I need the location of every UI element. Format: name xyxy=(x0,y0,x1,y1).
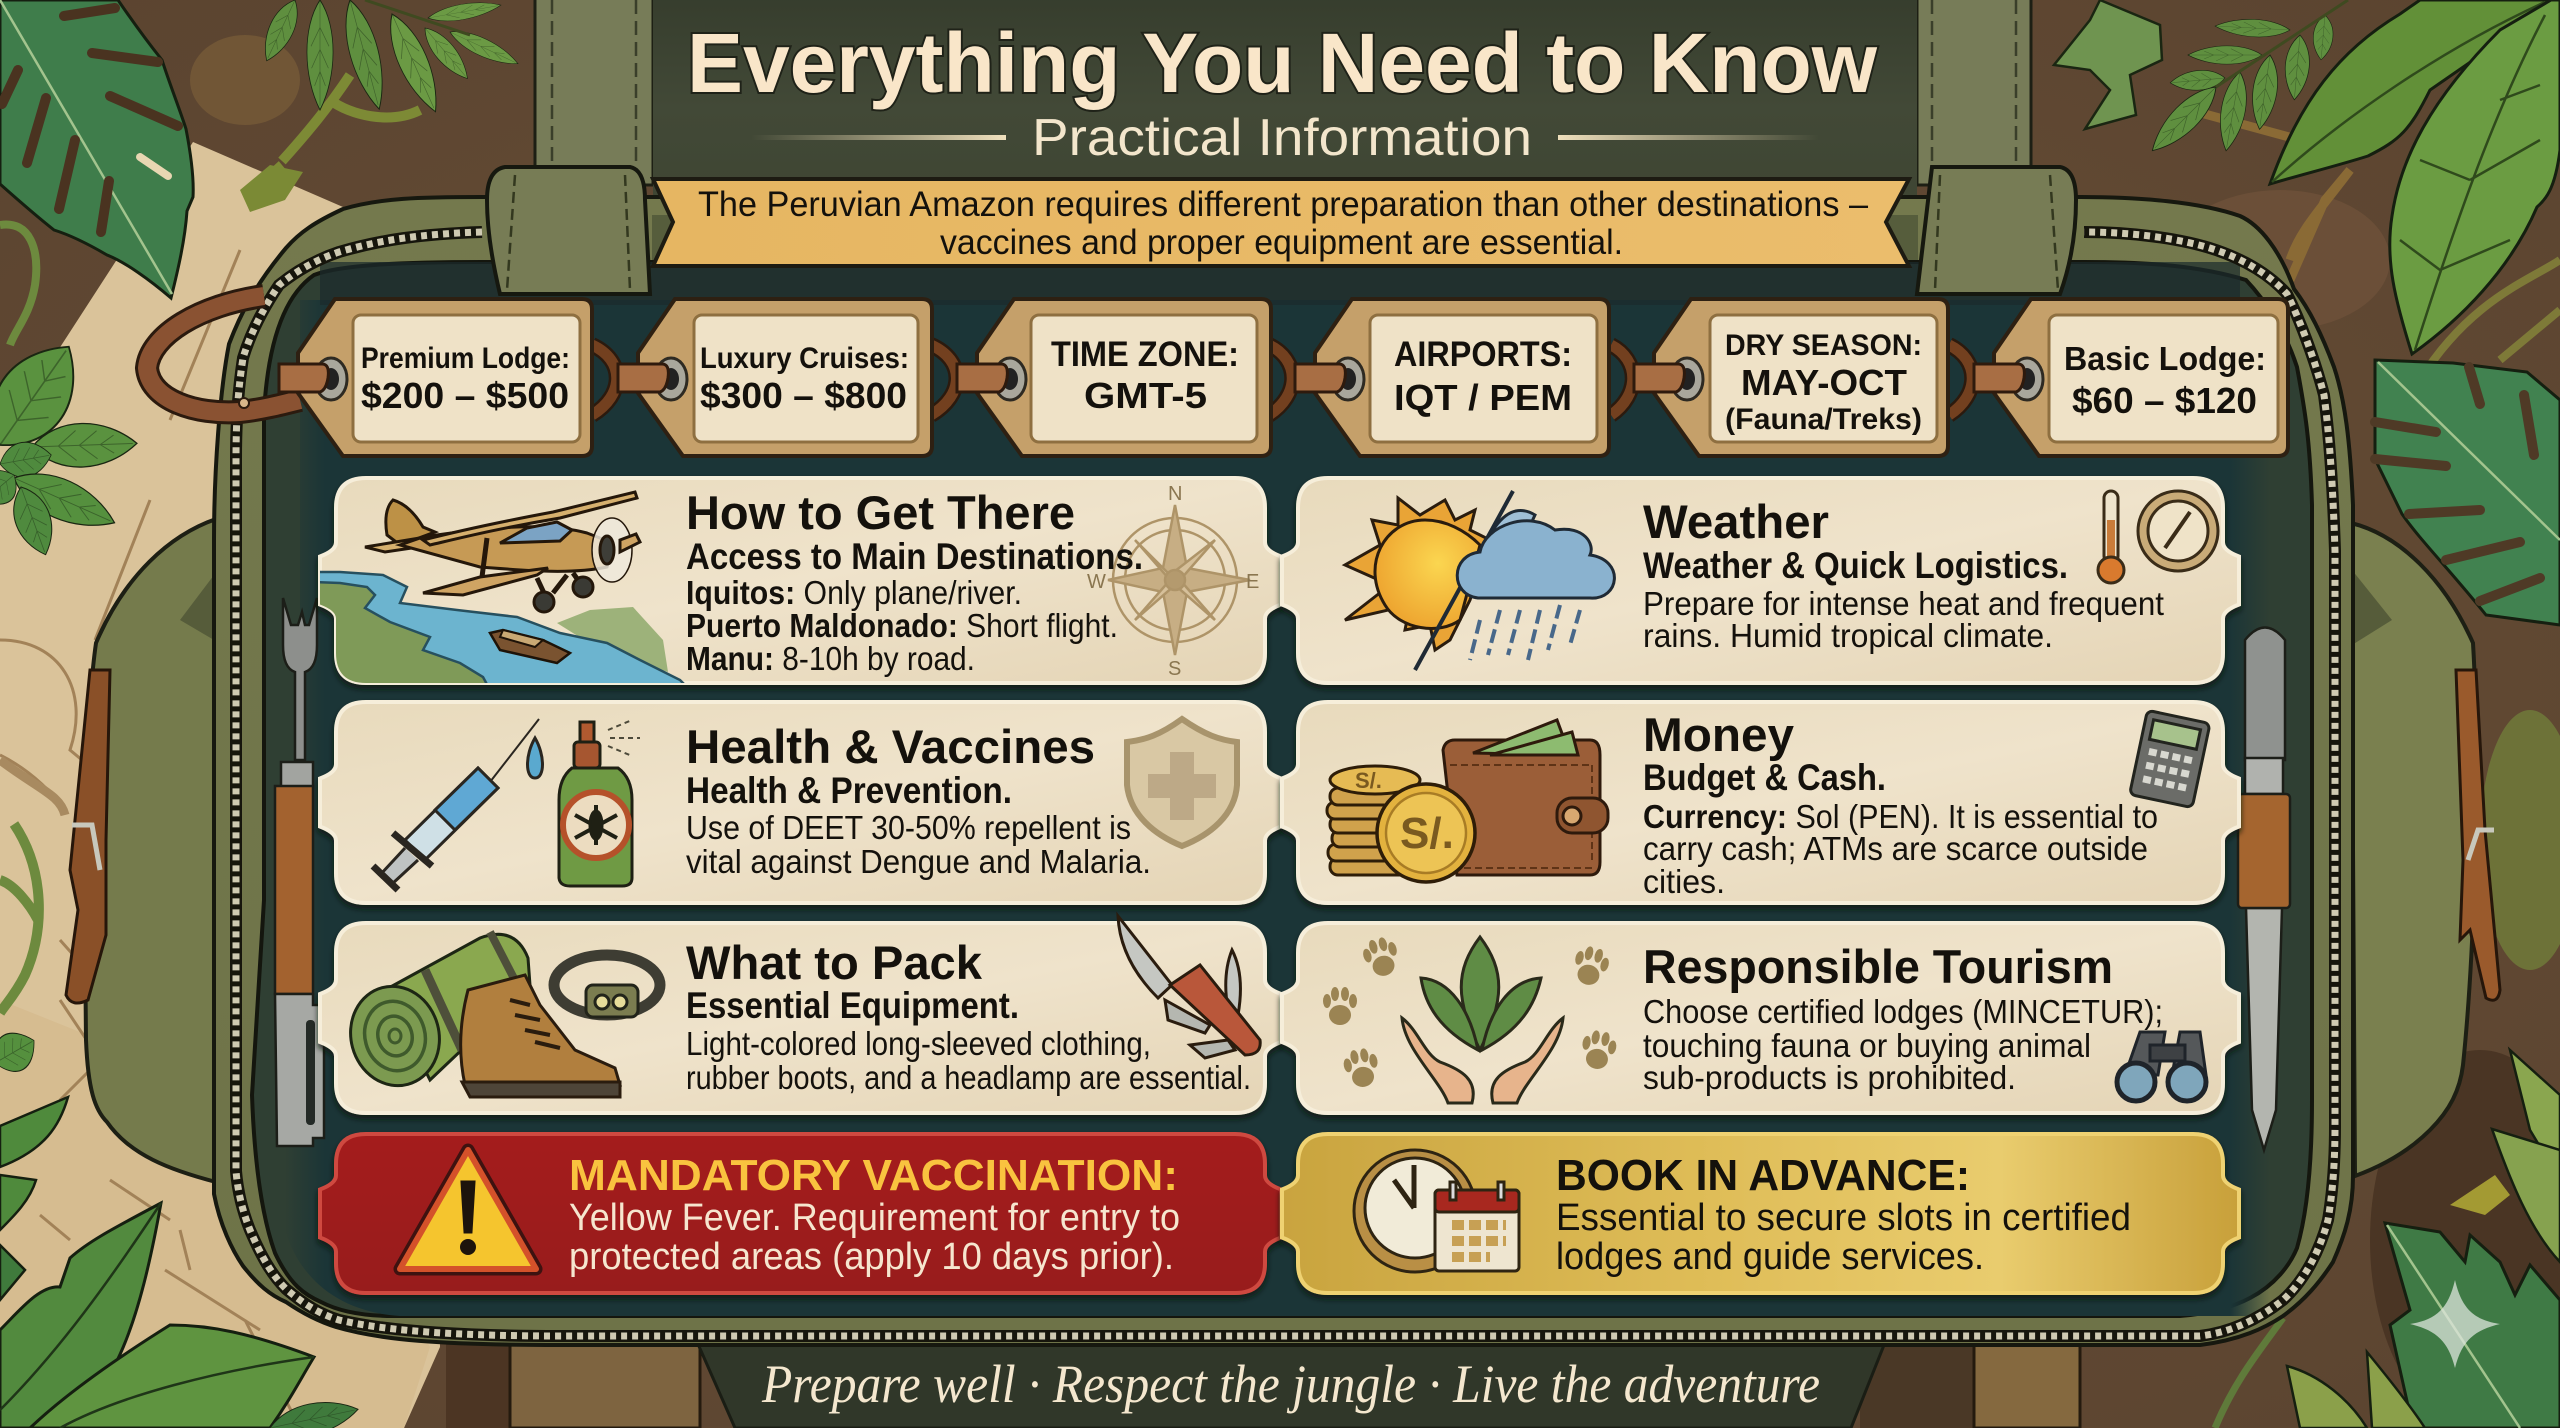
bag: zipper xyxy=(236,232,2335,1336)
card: Money xyxy=(1282,702,2239,903)
foliage: top-right big leaves xyxy=(2270,0,2560,354)
alert text xyxy=(569,1151,1180,1278)
foliage: left vine xyxy=(0,824,44,1080)
tag: Airports: AIRPORTS: xyxy=(1394,335,1572,374)
card text: Essential Equipment. xyxy=(686,985,1019,1026)
icon: animal paw prints xyxy=(1323,934,1619,1090)
bag: dark top panel xyxy=(653,0,1917,220)
tag: Basic Lodge xyxy=(1974,299,2288,456)
card text: rains. Humid tropical climate. xyxy=(1643,617,2053,654)
tag: Dry Season: (Fauna/Treks) xyxy=(1725,403,1922,436)
callout text: Essential to secure slots in certified xyxy=(1556,1197,2131,1239)
icon: hands holding plant xyxy=(1402,937,1563,1103)
alert text: MANDATORY VACCINATION: xyxy=(569,1151,1178,1200)
card text: Iquitos: Only plane/river. xyxy=(686,574,1022,611)
icon: calculator xyxy=(2130,710,2210,808)
card text: Prepare for intense heat and frequent xyxy=(1643,585,2164,622)
illustration: compass rose: N xyxy=(1168,483,1182,505)
card text: What to Pack xyxy=(686,936,983,989)
foliage: right monstera xyxy=(2375,360,2560,625)
strap: right pocket buckle xyxy=(2456,670,2500,1000)
icon: large coin xyxy=(1377,784,1475,882)
bottom straps xyxy=(446,1330,2080,1428)
card text: Light-colored long-sleeved clothing, xyxy=(686,1025,1151,1062)
background: old map xyxy=(0,142,440,1428)
intro ribbon xyxy=(653,179,1909,266)
alert text: Yellow Fever. Requirement for entry to xyxy=(569,1197,1180,1239)
icon: warning triangle xyxy=(400,1150,536,1269)
tag: Luxury Cruises xyxy=(618,299,932,456)
foliage: left mid sprig xyxy=(0,224,138,561)
card: What to Pack xyxy=(320,916,1281,1113)
card text: Manu: 8-10h by road. xyxy=(686,640,975,677)
card text: touching fauna or buying animal xyxy=(1643,1027,2091,1064)
bag: shoulder straps xyxy=(535,0,2031,185)
card text xyxy=(1643,708,2158,900)
tag: Luxury Cruises: Luxury Cruises: xyxy=(700,342,909,375)
callout text: BOOK IN ADVANCE: xyxy=(1556,1151,1970,1200)
illustration: compass rose: S xyxy=(1168,658,1181,680)
card text: Use of DEET 30-50% repellent is xyxy=(686,809,1131,846)
icon: clock xyxy=(1354,1150,1476,1272)
card text xyxy=(686,486,1143,677)
card text: Puerto Maldonado: Short flight. xyxy=(686,607,1118,644)
tag: Time Zone: TIME ZONE: xyxy=(1051,335,1239,374)
icon: coin stack: S/. xyxy=(1355,768,1382,793)
tag: Time Zone xyxy=(957,299,1271,456)
card text xyxy=(686,720,1151,880)
icon: sun xyxy=(1345,498,1490,650)
tool: right sheath knife xyxy=(2238,628,2290,1150)
footer tagline: Prepare well · Respect the jungle · Live the adventure xyxy=(761,1354,1820,1414)
tag: Basic Lodge: $60 – $120 xyxy=(2072,380,2257,421)
tool: left multi-tool fork xyxy=(275,598,324,1146)
callout: book in advance xyxy=(1282,1134,2239,1293)
card text: Choose certified lodges (MINCETUR); xyxy=(1643,993,2163,1030)
icon: syringe and drop xyxy=(373,719,542,890)
card text: sub-products is prohibited. xyxy=(1643,1059,2016,1096)
card text: Weather & Quick Logistics. xyxy=(1643,545,2068,586)
bag: main body xyxy=(214,197,2353,1345)
tag: Airports: IQT / PEM xyxy=(1394,377,1572,418)
illustration: compass rose: E xyxy=(1246,571,1259,593)
footer panel xyxy=(694,1335,1888,1428)
subtitle with rules: Practical Information xyxy=(1032,109,1532,167)
card text: rubber boots, and a headlamp are essential. xyxy=(686,1059,1251,1096)
subtitle with rules xyxy=(751,109,1819,167)
card text xyxy=(686,936,1251,1096)
icon: headlamp xyxy=(554,955,660,1017)
illustration: compass rose xyxy=(1087,483,1259,680)
intro ribbon: vaccines and proper equipment are essential. xyxy=(940,223,1623,262)
callout text xyxy=(1556,1151,2131,1278)
icon: large coin: S/. xyxy=(1400,809,1454,858)
card: Responsible Tourism xyxy=(1282,923,2239,1113)
icon: coin stack xyxy=(1327,766,1420,875)
icon: thermometer and gauge xyxy=(2098,491,2218,583)
card text xyxy=(1643,940,2163,1096)
card text xyxy=(1643,495,2164,654)
card text: carry cash; ATMs are scarce outside xyxy=(1643,830,2148,867)
card text: Budget & Cash. xyxy=(1643,757,1886,798)
alert: mandatory vaccination xyxy=(320,1134,1281,1293)
card text: Currency: Sol (PEN). It is essential to xyxy=(1643,798,2158,835)
card text: Responsible Tourism xyxy=(1643,940,2113,993)
card text: Health & Vaccines xyxy=(686,720,1095,773)
bag: strap loops xyxy=(487,167,2076,294)
foliage: bottom-left leaves xyxy=(0,1097,361,1428)
strap: left pocket buckle xyxy=(66,670,110,1003)
card text: Money xyxy=(1643,708,1794,761)
tag: Dry Season: MAY-OCT xyxy=(1741,362,1907,403)
icon: calendar xyxy=(1435,1182,1519,1271)
title: Everything You Need to Know xyxy=(687,16,1878,110)
bag: left side pocket xyxy=(85,519,216,1182)
card text: cities. xyxy=(1643,863,1725,900)
card text: Weather xyxy=(1643,495,1829,548)
icon: sparkle watermark xyxy=(2410,1280,2500,1368)
tag: Airports xyxy=(1295,299,1609,456)
card: Health & Vaccines xyxy=(320,702,1281,903)
icon: hiking boot xyxy=(461,975,620,1097)
bag: right side pocket xyxy=(2351,523,2476,1176)
illustration: river and forest xyxy=(315,572,690,690)
icon: wallet with bills xyxy=(1443,720,1608,875)
icon: pocket knife xyxy=(1118,916,1260,1058)
card: Weather xyxy=(1282,478,2239,683)
icon: repellent spray xyxy=(559,720,640,886)
card text: Access to Main Destinations. xyxy=(686,536,1143,577)
card text: How to Get There xyxy=(686,486,1075,539)
card text: Health & Prevention. xyxy=(686,770,1012,811)
icon: medical shield xyxy=(1127,719,1237,846)
alert text: protected areas (apply 10 days prior). xyxy=(569,1236,1174,1278)
tag: Time Zone: GMT-5 xyxy=(1084,375,1207,416)
illustration: propeller plane xyxy=(365,492,640,612)
card text: vital against Dengue and Malaria. xyxy=(686,843,1151,880)
foliage: bottom-right leaves xyxy=(2215,1050,2560,1428)
icon: storm cloud with rain xyxy=(1415,491,1614,670)
tag: Luxury Cruises: $300 – $800 xyxy=(700,375,907,416)
callout text: lodges and guide services. xyxy=(1556,1236,1984,1278)
tag: Premium Lodge: Premium Lodge: xyxy=(361,342,570,375)
icon: binoculars xyxy=(2117,1032,2206,1101)
luggage strap loop xyxy=(147,296,300,412)
tag: Basic Lodge: Basic Lodge: xyxy=(2064,340,2266,377)
intro ribbon: The Peruvian Amazon requires different preparation than other destinations – xyxy=(698,185,1869,224)
foliage: top-left monstera xyxy=(0,0,193,298)
tag: Premium Lodge: $200 – $500 xyxy=(361,375,569,416)
icon: rolled sleeping mat xyxy=(340,932,530,1096)
illustration: compass rose: W xyxy=(1087,571,1106,593)
foliage: top vine and sprig xyxy=(240,0,522,212)
tag: Dry Season xyxy=(1634,299,1948,456)
foliage: top-right small leaves xyxy=(2054,0,2348,160)
card: How to Get There xyxy=(315,478,1281,690)
tag: Premium Lodge xyxy=(279,299,592,456)
tag: Dry Season: DRY SEASON: xyxy=(1725,329,1922,362)
bag: inner compartment xyxy=(252,262,2312,1316)
tag connectors xyxy=(592,345,1972,415)
